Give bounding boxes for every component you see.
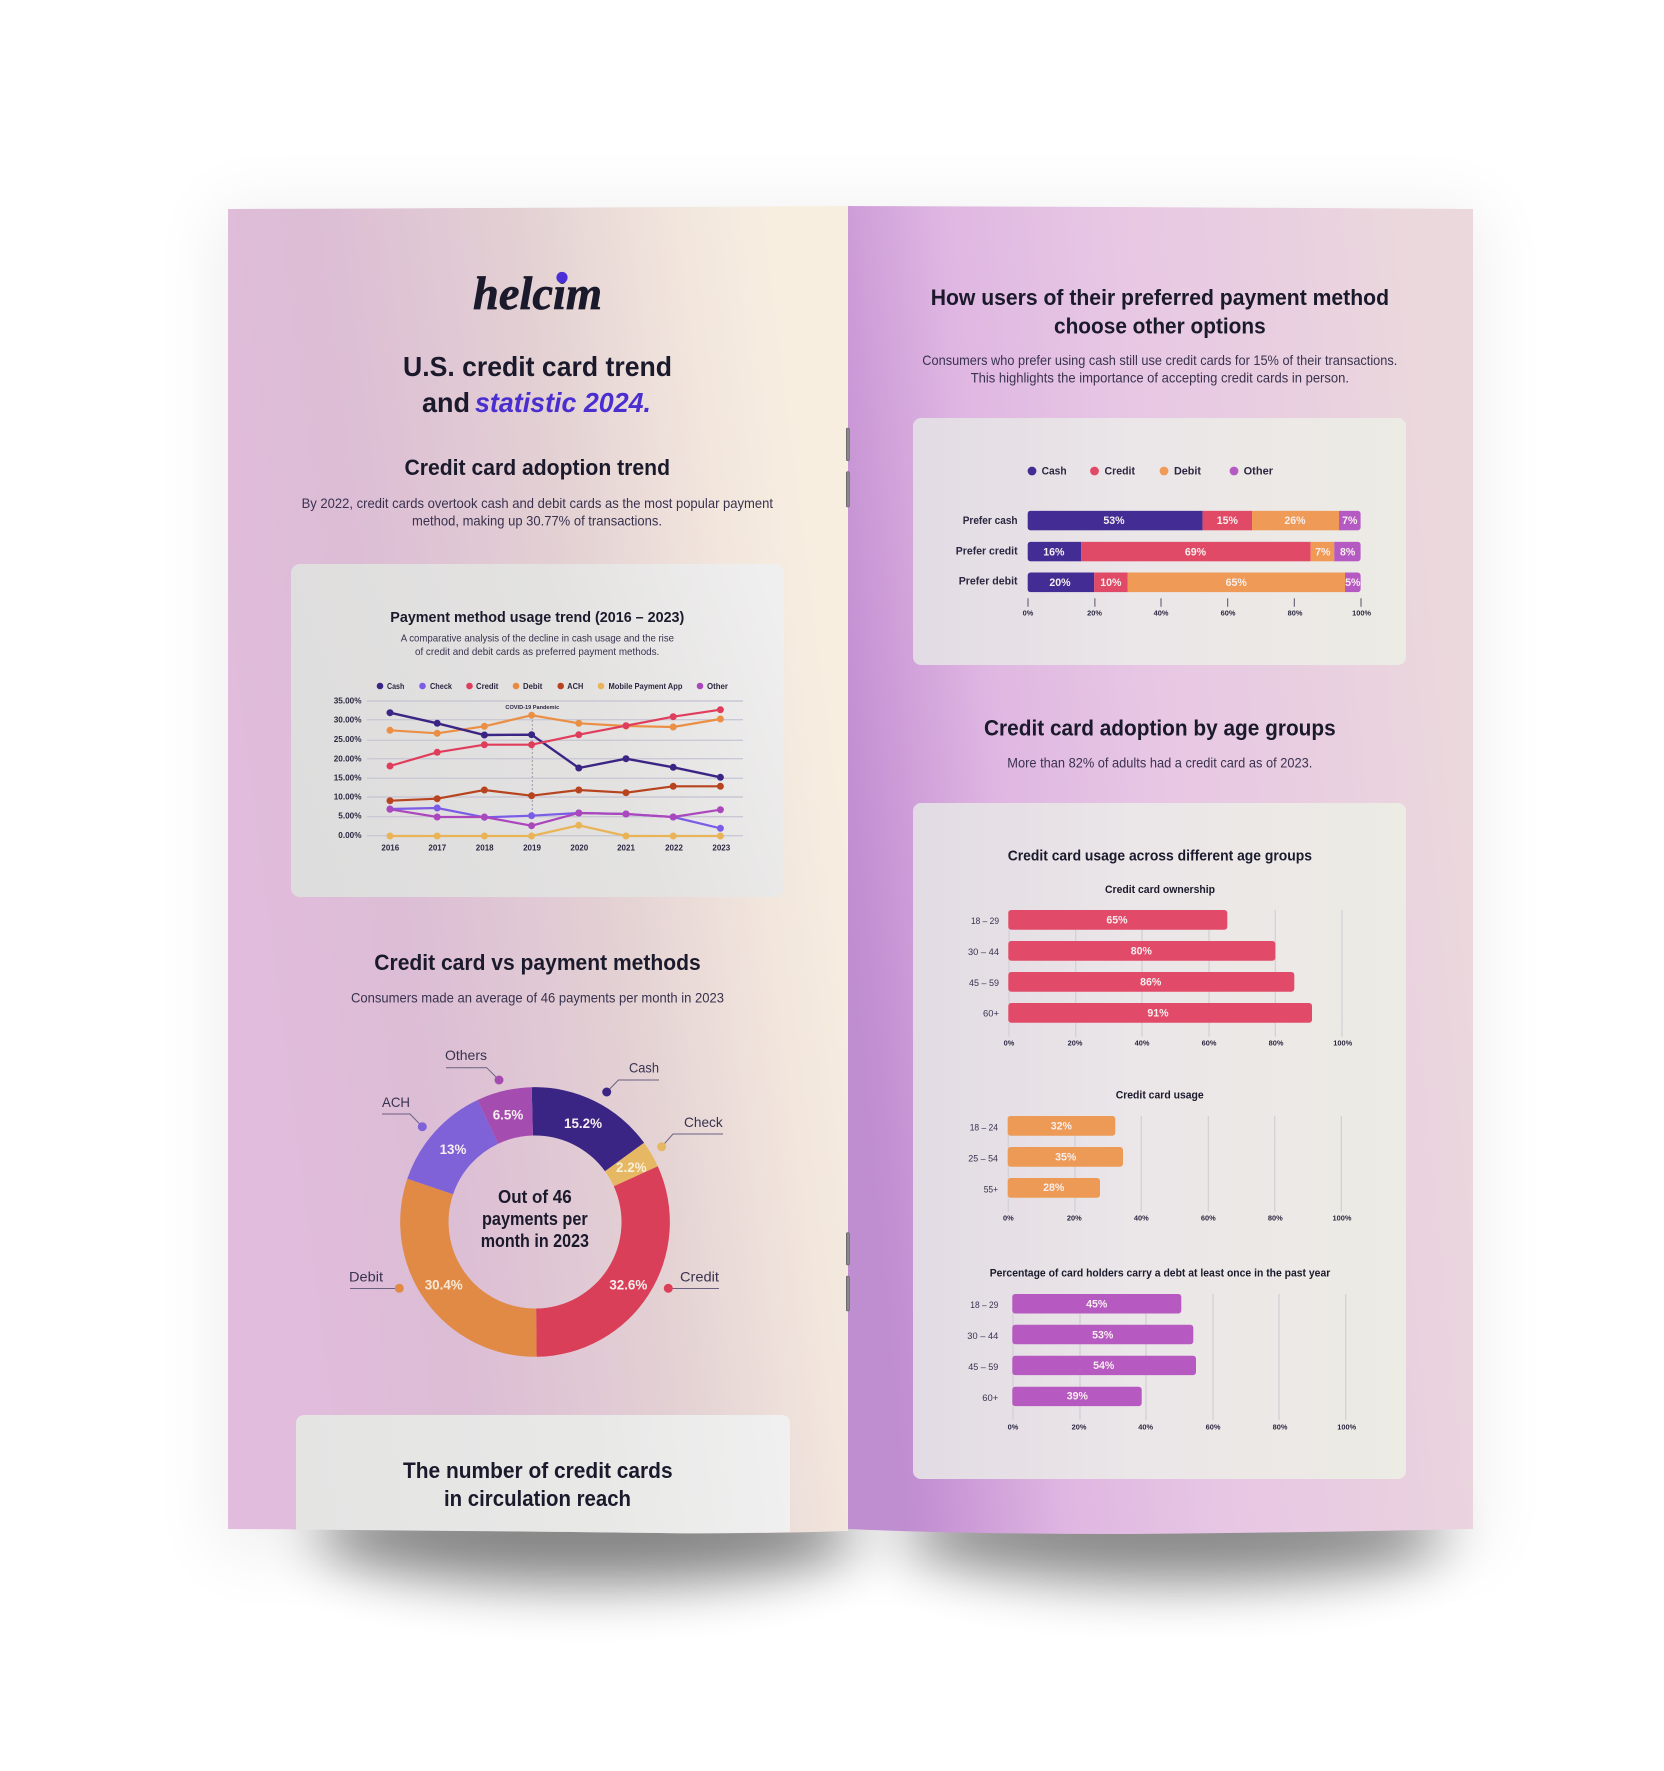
bar chart: credit card usage: 100% <box>1333 1214 1352 1223</box>
legend: Cash <box>1042 466 1067 478</box>
x axis labels: 2023 <box>712 843 731 852</box>
series: check <box>386 804 724 832</box>
y axis labels: 5.00% <box>338 812 362 821</box>
bar chart: card holders carrying debt: 40% <box>1138 1422 1154 1431</box>
row: prefer credit: 7% <box>1315 546 1331 558</box>
row: prefer credit: Prefer credit <box>956 546 1018 558</box>
bar chart: card holders carrying debt: 60% <box>1206 1422 1221 1431</box>
chart heading: Credit card ownership <box>1105 884 1215 896</box>
axis <box>1023 598 1371 618</box>
axis: 80% <box>1288 608 1303 618</box>
y axis labels: 25.00% <box>334 735 362 744</box>
callout: credit: Credit <box>680 1269 719 1285</box>
bar chart: card holders carrying debt: 80% <box>1273 1422 1288 1431</box>
bar chart: credit card ownership: 18 – 29 <box>971 915 999 926</box>
chart subtitle: A comparative analysis of the decline in cash usage and the rise <box>401 634 674 645</box>
y axis labels <box>334 697 362 840</box>
row: prefer cash: 53% <box>1103 515 1125 527</box>
y axis labels: 30.00% <box>334 716 362 725</box>
callout: ach <box>382 1094 427 1131</box>
bar chart: credit card usage: 40% <box>1134 1214 1149 1223</box>
axis: 60% <box>1221 608 1236 618</box>
text: payments per month: Consumers made an average of 46 payments per month in 2023 <box>351 990 724 1005</box>
text: more than 82%: More than 82% of adults had a credit card as of 2023. <box>1007 756 1312 771</box>
x axis labels: 2016 <box>381 843 400 852</box>
bar chart: card holders carrying debt: 18 – 29 <box>970 1299 998 1310</box>
x axis labels: 2021 <box>617 843 635 852</box>
bar chart: credit card ownership: 60+ <box>983 1008 1000 1018</box>
bar chart: card holders carrying debt: 100% <box>1337 1422 1357 1431</box>
bar chart: card holders carrying debt: 45% <box>1086 1298 1108 1310</box>
axis: 100% <box>1352 608 1371 618</box>
x axis labels: 2022 <box>665 843 683 852</box>
bar chart: credit card ownership: 45 – 59 <box>969 977 999 988</box>
card heading: The number of credit cards <box>403 1458 673 1483</box>
callout: check: Check <box>684 1114 724 1130</box>
row: prefer credit <box>956 542 1361 561</box>
bar chart: credit card usage: 60% <box>1201 1214 1216 1223</box>
title: U.S. credit card trend <box>403 351 672 382</box>
panel: left page <box>228 206 848 1533</box>
donut center text <box>481 1187 589 1251</box>
donut chart <box>349 1047 724 1357</box>
annotation: covid-19 pandemic <box>505 705 559 816</box>
bar chart: card holders carrying debt: 60+ <box>982 1392 999 1403</box>
chart subtitle: of credit and debit cards as preferred payment methods. <box>415 647 659 658</box>
bar chart: credit card usage: 35% <box>1055 1152 1077 1164</box>
text: preferred payment description: This highlights the importance of accepting credit cards in person. <box>971 371 1349 386</box>
x axis labels: 2017 <box>428 843 447 852</box>
heading: credit card adoption trend: Credit card adoption trend <box>404 455 670 480</box>
bar chart: credit card ownership: 40% <box>1135 1039 1150 1048</box>
bar chart: credit card ownership: 80% <box>1269 1039 1284 1048</box>
bar chart: credit card ownership: 65% <box>1106 914 1128 926</box>
callout: others <box>445 1047 504 1084</box>
segment values: 32.6% <box>609 1278 647 1293</box>
row: prefer debit: 20% <box>1049 577 1071 589</box>
bar chart: credit card usage: 25 – 54 <box>968 1152 998 1163</box>
y axis labels: 20.00% <box>334 754 362 763</box>
segment values <box>425 1107 647 1293</box>
chart legend: Other <box>707 681 729 691</box>
bar chart: card holders carrying debt: 54% <box>1093 1360 1115 1372</box>
segment: cash <box>532 1087 644 1171</box>
segment values: 2.2% <box>616 1160 647 1175</box>
segment: credit <box>536 1166 670 1357</box>
bar chart: credit card usage: 0% <box>1003 1214 1014 1223</box>
row: prefer debit: 10% <box>1100 577 1122 589</box>
staples <box>846 428 849 1311</box>
bar chart: credit card ownership: 60% <box>1202 1039 1217 1048</box>
panel: preference stacked bar card <box>913 418 1406 665</box>
segment: debit <box>400 1179 537 1357</box>
legend <box>1028 466 1274 478</box>
axis: 0% <box>1023 608 1034 618</box>
bar chart: card holders carrying debt: 45 – 59 <box>968 1361 998 1372</box>
row: prefer cash: 26% <box>1284 515 1306 527</box>
line chart <box>334 697 743 852</box>
chart legend <box>377 681 729 691</box>
card heading <box>403 1458 673 1511</box>
segment: others <box>478 1087 533 1144</box>
bar chart: card holders carrying debt: 20% <box>1072 1422 1087 1431</box>
bar chart: credit card usage: 32% <box>1051 1120 1072 1132</box>
row: prefer debit <box>959 572 1361 592</box>
chart legend: Debit <box>523 681 542 691</box>
chart legend: Check <box>430 681 452 691</box>
axis: 40% <box>1154 608 1169 618</box>
annotation: covid-19 pandemic: COVID-19 Pandemic <box>505 705 559 711</box>
bar chart: card holders carrying debt: 0% <box>1008 1422 1019 1431</box>
y axis labels: 0.00% <box>338 831 362 840</box>
callout: cash: Cash <box>629 1060 659 1076</box>
legend: Debit <box>1174 466 1201 478</box>
bar chart: credit card usage <box>968 1089 1352 1223</box>
series: other <box>386 806 724 829</box>
y axis labels: 15.00% <box>334 773 362 782</box>
bar chart: credit card ownership: 91% <box>1147 1007 1169 1019</box>
bar chart: credit card ownership: 20% <box>1068 1039 1083 1048</box>
chart heading: Credit card usage <box>1116 1089 1204 1101</box>
x axis labels: 2018 <box>476 843 494 852</box>
row: prefer debit: Prefer debit <box>959 576 1018 588</box>
logo: helcim: helcim <box>473 268 602 320</box>
chart legend: Credit <box>476 681 498 691</box>
bar chart: card holders carrying debt: 53% <box>1092 1330 1114 1342</box>
bar chart: card holders carrying debt <box>967 1267 1357 1431</box>
bar chart: card holders carrying debt: 30 – 44 <box>967 1330 998 1341</box>
heading: credit card vs payment methods: Credit card vs payment methods <box>374 950 701 975</box>
donut center text: Out of 46 <box>498 1187 572 1207</box>
chart subtitle <box>401 634 674 658</box>
bar chart: credit card usage: 20% <box>1067 1214 1082 1223</box>
chart heading: Percentage of card holders carry a debt at least once in the past year <box>990 1267 1331 1279</box>
bar chart: credit card ownership: 80% <box>1131 945 1152 957</box>
segment: check <box>605 1143 658 1186</box>
series: debit <box>386 712 724 737</box>
panel: payment method usage trend card <box>291 564 784 897</box>
row: prefer credit: 16% <box>1043 546 1065 558</box>
series: mobile payment app <box>386 822 724 840</box>
bar chart: card holders carrying debt: 39% <box>1067 1390 1088 1402</box>
chart legend: Cash <box>387 681 404 691</box>
bar chart: credit card ownership: 0% <box>1004 1039 1015 1048</box>
segment: ach <box>407 1100 498 1194</box>
title line 2: statistic 2024. <box>475 387 651 418</box>
y axis labels: 10.00% <box>334 793 362 802</box>
infographic: helcim brochure spread <box>220 206 1484 1622</box>
x axis labels: 2019 <box>523 843 541 852</box>
donut center text: payments per <box>482 1209 588 1229</box>
chart legend: Mobile Payment App <box>608 681 682 691</box>
title line 2: and <box>422 387 470 418</box>
y axis labels: 35.00% <box>334 697 362 706</box>
row: prefer debit: 5% <box>1345 577 1361 589</box>
row: prefer cash: Prefer cash <box>963 515 1018 527</box>
bar chart: credit card usage: 28% <box>1043 1182 1065 1194</box>
row: prefer credit: 69% <box>1185 546 1207 558</box>
row: prefer cash <box>963 511 1361 530</box>
bar chart: credit card usage: 80% <box>1268 1214 1283 1223</box>
text: adoption description: method, making up 30.77% of transactions. <box>412 514 662 529</box>
callout: credit <box>664 1269 719 1293</box>
segment values: 15.2% <box>564 1116 602 1131</box>
segment values: 13% <box>440 1142 466 1157</box>
heading: preferred payment method: choose other options <box>1054 313 1266 338</box>
series: cash <box>386 709 724 781</box>
row: prefer cash: 7% <box>1342 515 1358 527</box>
heading: preferred payment method <box>931 285 1389 338</box>
bar chart: credit card ownership: 86% <box>1140 976 1162 988</box>
callout: others: Others <box>445 1047 487 1063</box>
callout: debit <box>349 1269 404 1293</box>
chart legend: ACH <box>567 681 583 691</box>
panel: right page <box>848 206 1473 1534</box>
axis: 20% <box>1087 608 1102 618</box>
text: preferred payment description: Consumers who prefer using cash still use credit cards for 15% of their transactions. <box>922 353 1397 368</box>
text: preferred payment description <box>922 353 1397 386</box>
text: adoption description <box>302 496 773 529</box>
callout: cash <box>602 1060 659 1096</box>
series: ach <box>386 783 724 804</box>
panel: age groups card <box>913 803 1406 1479</box>
callout: debit: Debit <box>349 1269 383 1285</box>
row: prefer cash: 15% <box>1217 515 1238 527</box>
bar chart: credit card ownership: 100% <box>1333 1039 1353 1048</box>
chart title: Payment method usage trend (2016 – 2023) <box>390 610 684 626</box>
series: credit <box>386 706 724 770</box>
callout: check <box>657 1114 724 1151</box>
segment values: 6.5% <box>493 1107 523 1122</box>
bar chart: credit card ownership: 30 – 44 <box>968 946 999 957</box>
legend: Other <box>1244 466 1274 478</box>
panel: number of credit cards card <box>296 1415 790 1533</box>
text: adoption description: By 2022, credit cards overtook cash and debit cards as the most popular payment <box>302 496 773 511</box>
x axis labels <box>381 843 731 852</box>
callout: ach: ACH <box>382 1094 410 1110</box>
heading: preferred payment method: How users of their preferred payment method <box>931 285 1389 310</box>
bar chart: credit card usage: 55+ <box>984 1183 998 1194</box>
bar chart: credit card ownership <box>968 884 1353 1048</box>
legend: Credit <box>1104 466 1135 478</box>
heading: adoption by age groups: Credit card adoption by age groups <box>984 716 1336 741</box>
card heading: in circulation reach <box>444 1486 631 1511</box>
card title: Credit card usage across different age groups <box>1008 849 1312 865</box>
segment values: 30.4% <box>425 1278 463 1293</box>
x axis labels: 2020 <box>570 843 589 852</box>
row: prefer credit: 8% <box>1340 546 1356 558</box>
bar chart: credit card usage: 18 – 24 <box>970 1121 998 1132</box>
donut center text: month in 2023 <box>481 1231 589 1251</box>
row: prefer debit: 65% <box>1226 577 1247 589</box>
